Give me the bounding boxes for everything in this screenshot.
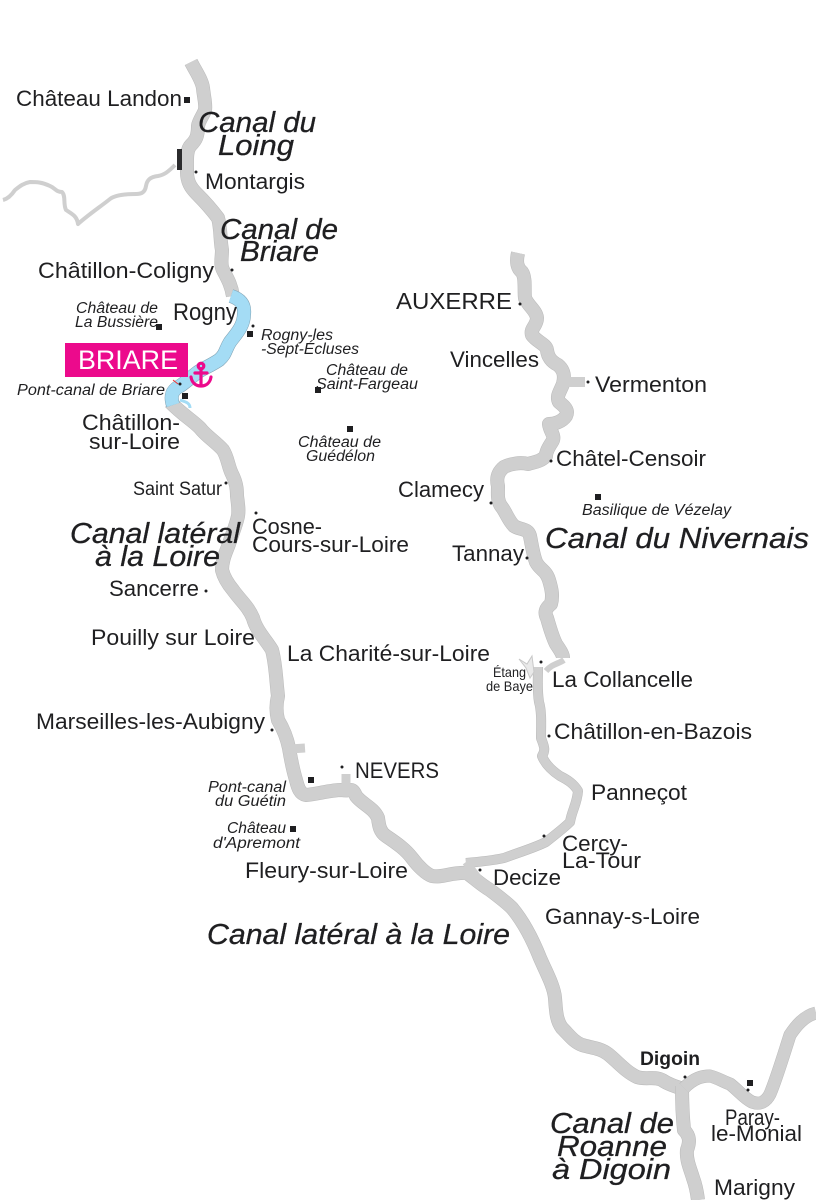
labels: north-west towns: Cosne- xyxy=(252,514,322,539)
labels: landmarks in italics xyxy=(17,300,732,852)
labels: canal names: Canal latéral xyxy=(70,518,242,550)
labels: landmarks in italics: Basilique de Vézelay xyxy=(582,502,732,519)
labels: landmarks in italics: Château de xyxy=(76,300,158,317)
labels: landmarks in italics: Pont-canal xyxy=(208,779,287,796)
labels: canal names: à la Loire xyxy=(95,541,220,573)
labels: east towns xyxy=(396,288,802,1200)
labels: north-west towns xyxy=(16,86,490,883)
labels: east towns: Châtel-Censoir xyxy=(556,446,706,471)
labels: landmarks in italics: Château de xyxy=(298,434,381,451)
labels: east towns: Digoin xyxy=(640,1049,700,1070)
city markers xyxy=(156,97,753,1092)
waterway: west branch xyxy=(3,165,175,224)
labels: north-west towns: Fleury-sur-Loire xyxy=(245,858,408,883)
waterway: Canal du Nivernais xyxy=(466,253,585,878)
labels: north-west towns: Saint Satur xyxy=(133,479,223,500)
labels: canal names: Briare xyxy=(240,236,319,268)
labels: landmarks in italics: Saint-Fargeau xyxy=(316,376,418,393)
labels: canal names: Canal de xyxy=(550,1108,674,1140)
labels: north-west towns: Sancerre xyxy=(109,576,199,601)
labels: landmarks in italics: du Guétin xyxy=(215,793,286,810)
labels: canal names: à Digoin xyxy=(552,1154,671,1186)
labels: east towns: Decize xyxy=(493,865,561,890)
labels: east towns: Paray- xyxy=(725,1105,780,1130)
labels: north-west towns: NEVERS xyxy=(355,758,439,783)
labels: canal names: Loing xyxy=(218,130,294,162)
waterway: Canal du Loing and Canal de Briare xyxy=(187,62,233,296)
labels: east towns: Panneçot xyxy=(591,780,687,805)
labels: east towns: Tannay xyxy=(452,541,524,566)
labels: landmarks in italics: La Bussière xyxy=(75,314,158,331)
labels: east towns: Gannay-s-Loire xyxy=(545,904,700,929)
labels: canal names: Canal latéral à la Loire xyxy=(207,919,510,951)
labels: canal names: Roanne xyxy=(557,1131,667,1163)
waterway: Digoin junction, Roanne canal and Paray branch xyxy=(682,1013,816,1200)
labels: canal names: Canal de xyxy=(220,214,338,246)
lock marker xyxy=(177,149,182,170)
labels: landmarks in italics: Guédélon xyxy=(306,448,375,465)
labels: east towns: La Collancelle xyxy=(552,667,693,692)
waterway: Canal latéral à la Loire north and south xyxy=(170,402,686,1090)
labels: east towns: le-Monial xyxy=(711,1121,802,1146)
BRIARE highlight box: BRIARE xyxy=(78,345,178,375)
labels: landmarks in italics: Rogny-les xyxy=(261,327,333,344)
labels: north-west towns: Pouilly sur Loire xyxy=(91,625,255,650)
labels: east towns: Vermenton xyxy=(595,372,707,397)
labels: east towns: Cercy- xyxy=(562,831,628,856)
labels: landmarks in italics: Pont-canal de Briare xyxy=(17,382,165,399)
labels: north-west towns: Montargis xyxy=(205,169,305,194)
labels: landmarks in italics: Château xyxy=(227,820,286,837)
lake: Étang de Baye xyxy=(519,656,534,678)
labels: east towns: Marigny xyxy=(714,1175,795,1200)
labels: north-west towns: La Charité-sur-Loire xyxy=(287,641,490,666)
labels: north-west towns: Châtillon-Coligny xyxy=(38,258,214,283)
labels: north-west towns: Châtillon- xyxy=(82,410,180,435)
labels: landmarks in italics: -Sept-Écluses xyxy=(261,341,359,358)
labels: east towns: Vincelles xyxy=(450,347,539,372)
icon: anchor xyxy=(191,363,211,386)
labels: landmarks in italics: Château de xyxy=(326,362,408,379)
labels: east towns: La-Tour xyxy=(562,848,641,873)
waterway: highlighted Briare section xyxy=(172,296,244,408)
labels: north-west towns: Cours-sur-Loire xyxy=(252,532,409,557)
labels: north-west towns: Marseilles-les-Aubigny xyxy=(36,709,265,734)
labels: north-west towns: Château Landon xyxy=(16,86,182,111)
labels: east towns: Étang xyxy=(493,664,526,680)
labels: canal names: Canal du Nivernais xyxy=(545,523,809,555)
labels: east towns: AUXERRE xyxy=(396,288,512,314)
labels: east towns: de Baye xyxy=(486,678,533,694)
labels: east towns: Clamecy xyxy=(398,477,484,502)
labels: landmarks in italics: d'Apremont xyxy=(213,835,301,852)
labels: canal names: Canal du xyxy=(198,107,316,139)
labels: north-west towns: sur-Loire xyxy=(89,429,180,454)
labels: north-west towns: Rogny xyxy=(173,299,237,326)
labels: east towns: Châtillon-en-Bazois xyxy=(554,719,752,744)
